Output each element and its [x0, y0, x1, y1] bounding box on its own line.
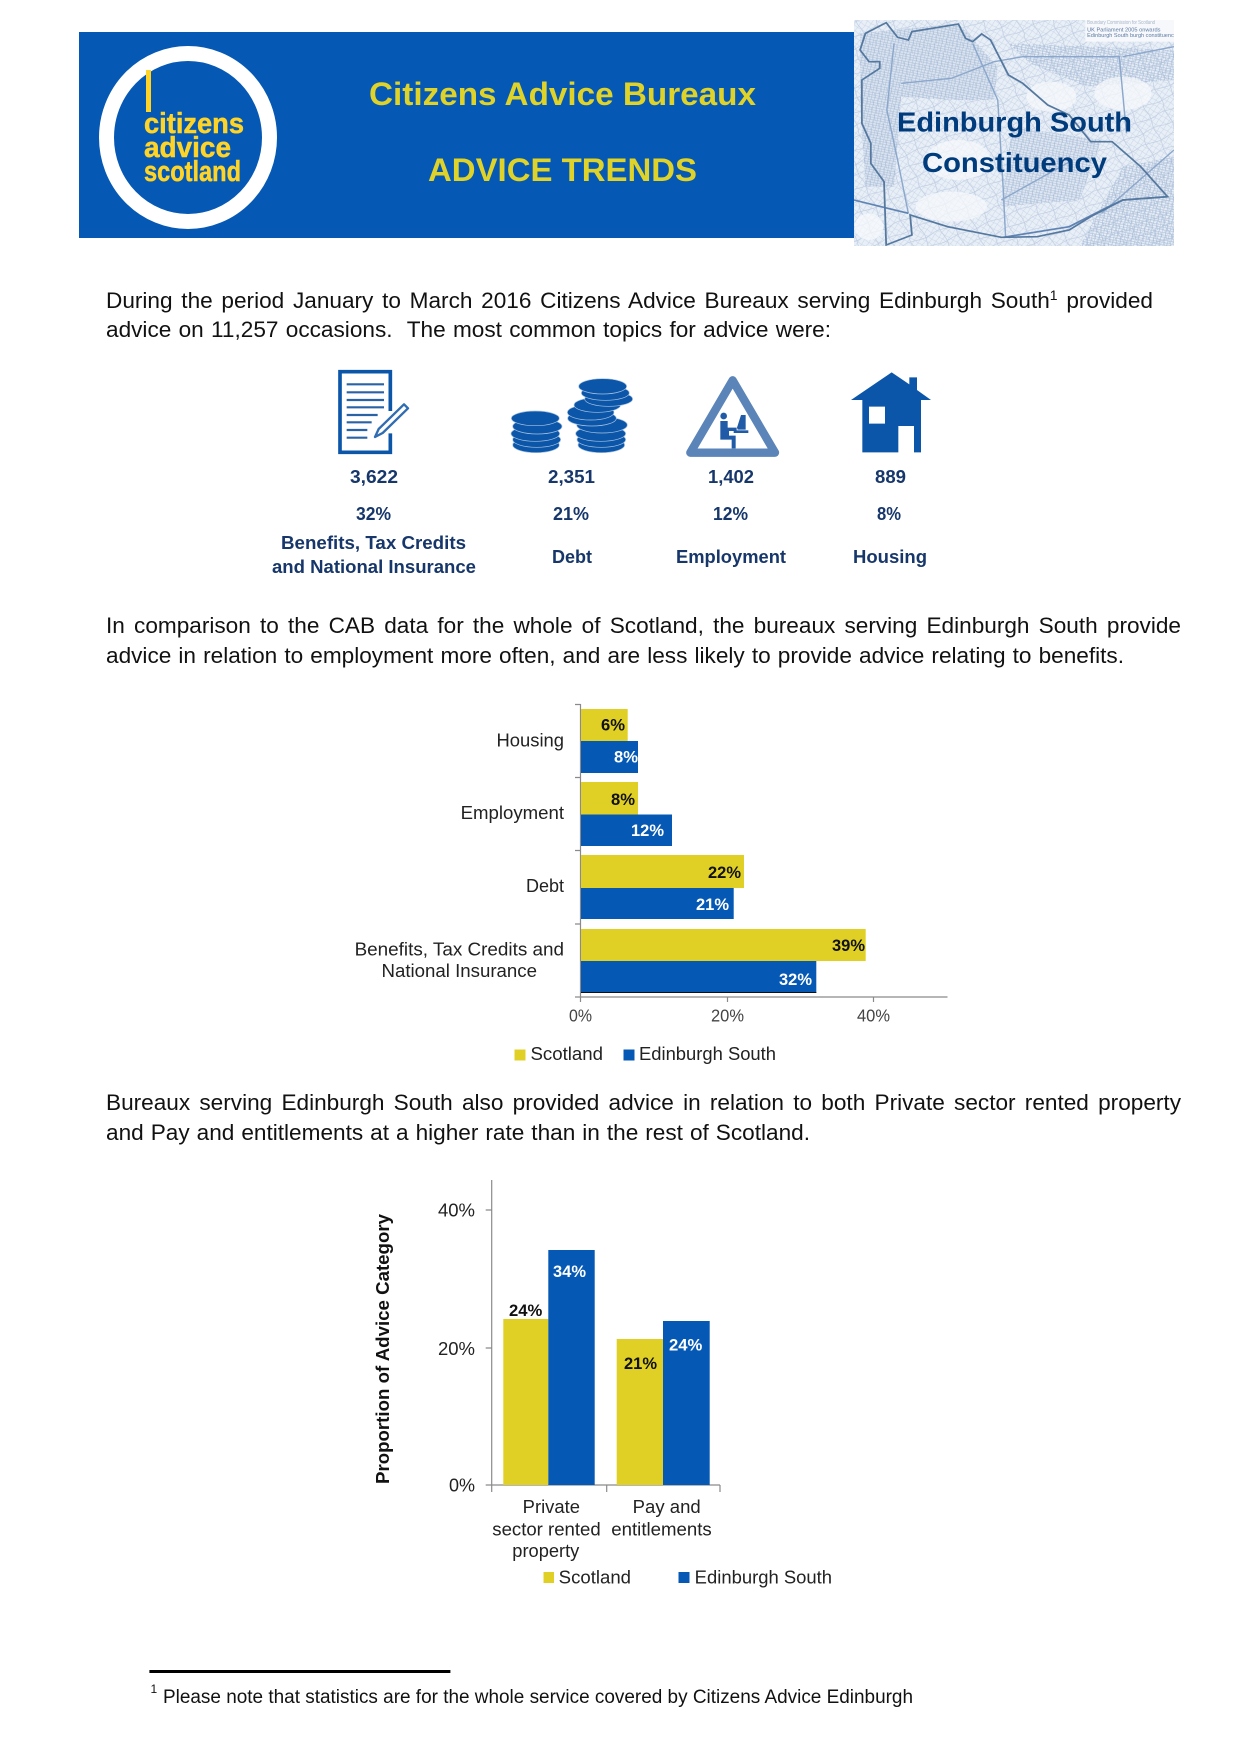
stat: debt: 2,351 [548, 466, 595, 487]
text block: Scotland comparison paragraph: advice in relation to employment more often, and are less likely to provide advice relating to benefits. [106, 642, 1124, 668]
stat: employment: Employment [676, 546, 786, 567]
panel: top advice topics [272, 372, 931, 577]
bars: benefits: 39% [832, 937, 865, 955]
bars: employment: 8% [611, 791, 635, 809]
legend: Edinburgh South [639, 1043, 776, 1064]
chart: private renting and pay column bars [373, 1180, 832, 1587]
stat: housing: 8% [877, 503, 901, 524]
stat: employment: 12% [713, 503, 748, 524]
heading: Edinburgh South Constituency: Edinburgh South [897, 106, 1132, 138]
x axis labels: 0% [569, 1006, 592, 1026]
legend: Scotland [559, 1566, 631, 1587]
stat: benefits [272, 466, 476, 577]
bars: debt: 21% [696, 896, 729, 914]
subtitle: ADVICE TRENDS: ADVICE TRENDS [428, 152, 697, 188]
icon: house [851, 372, 931, 452]
footnote: Please note that statistics are for the whole service covered by Citizens Advice Edinburgh [163, 1687, 913, 1708]
logo: citizens advice scotland: citizens [144, 108, 244, 140]
stat: debt: 21% [553, 503, 589, 524]
stat: benefits: Benefits, Tax Credits [281, 532, 466, 553]
stat: benefits: 3,622 [350, 466, 398, 487]
bars: debt [581, 855, 744, 919]
text block: private rented and pay paragraph: Bureaux serving Edinburgh South also provided advice in relation to both Private sector rented property [106, 1090, 1181, 1114]
y axis labels: 0% [449, 1475, 475, 1496]
category labels [355, 730, 564, 981]
bars: benefits: 32% [779, 971, 812, 989]
x axis labels [569, 1006, 890, 1026]
category labels: property [512, 1540, 580, 1561]
logo: citizens advice scotland: advice [144, 132, 231, 164]
bars: pay and entitlements: 24% [669, 1337, 703, 1355]
bars: housing: 6% [601, 717, 625, 735]
bars: private sector rented property: 24% [509, 1302, 543, 1320]
bars: housing [581, 709, 638, 773]
panel: header banner [79, 32, 854, 238]
text block: Scotland comparison paragraph [106, 612, 1181, 668]
heading: Edinburgh South Constituency [897, 106, 1132, 178]
bars: benefits [581, 929, 866, 993]
icon: stacks of coins [511, 379, 633, 453]
bars: pay and entitlements [617, 1321, 710, 1485]
stat: housing: Housing [853, 546, 927, 567]
heading: Edinburgh South Constituency: Constituency [922, 147, 1107, 178]
text block: Scotland comparison paragraph: In comparison to the CAB data for the whole of Scotland, the bureaux serving Edinburgh South provide [106, 612, 1181, 638]
y axis labels: 20% [438, 1338, 475, 1359]
bars: debt: 22% [708, 864, 741, 882]
category labels: Employment [461, 802, 564, 823]
stat: benefits: 32% [356, 503, 391, 524]
bars: employment: 12% [631, 822, 664, 840]
y axis title: Proportion of Advice Category [373, 1214, 393, 1484]
stat: debt [548, 466, 595, 567]
logo: citizens advice scotland [106, 54, 270, 222]
category labels: Private [523, 1496, 580, 1517]
text block: private rented and pay paragraph [106, 1090, 1181, 1144]
bars: private sector rented property [503, 1250, 595, 1485]
footnote: 1 [150, 1682, 158, 1696]
legend [514, 1043, 776, 1064]
title: Citizens Advice Bureaux: Citizens Advice Bureaux [369, 76, 756, 112]
stat: housing [853, 466, 927, 567]
chart: topic comparison horizontal bars [355, 704, 948, 1064]
bars: pay and entitlements: 21% [624, 1355, 657, 1373]
bars: housing: 8% [614, 749, 638, 767]
category labels: sector rented [492, 1519, 601, 1540]
stat: benefits: and National Insurance [272, 556, 476, 577]
category labels: Housing [496, 730, 564, 751]
y axis labels [438, 1200, 475, 1496]
category labels: Benefits, Tax Credits and [355, 939, 564, 960]
footnote [149, 1670, 913, 1708]
legend [544, 1566, 832, 1587]
y axis labels: 40% [438, 1200, 475, 1221]
text block: private rented and pay paragraph: and Pay and entitlements at a higher rate than in the rest of Scotland. [106, 1120, 810, 1144]
icon: document and pencil [340, 372, 408, 452]
logo: citizens advice scotland: scotland [144, 156, 241, 188]
bars: employment [581, 782, 672, 846]
text block: intro paragraph [106, 286, 1153, 342]
legend: Scotland [530, 1043, 603, 1064]
category labels: Debt [526, 875, 564, 896]
panel: constituency map [854, 20, 1177, 246]
stat: employment [676, 466, 786, 567]
stat: employment: 1,402 [708, 466, 754, 487]
category labels: entitlements [611, 1519, 712, 1540]
panel: constituency map: UK Parliament 2005 onwards [1087, 27, 1160, 33]
legend: Edinburgh South [695, 1566, 832, 1587]
stat: debt: Debt [552, 546, 592, 567]
panel: constituency map: Boundary Commission for Scotland [1087, 20, 1155, 26]
category labels: Pay and [633, 1496, 701, 1517]
x axis labels: 40% [857, 1006, 890, 1026]
text block: intro paragraph: advice on 11,257 occasions. The most common topics for advice were: [106, 316, 831, 342]
text block: intro paragraph: During the period January to March 2016 Citizens Advice Bureaux serving Edinburgh South1 provided [106, 286, 1153, 312]
icon: workplace warning triangle [690, 380, 775, 453]
bars: private sector rented property: 34% [553, 1263, 586, 1281]
category labels: National Insurance [382, 960, 537, 981]
stat: housing: 889 [875, 466, 906, 487]
category labels [492, 1496, 712, 1561]
x axis labels: 20% [711, 1006, 744, 1026]
